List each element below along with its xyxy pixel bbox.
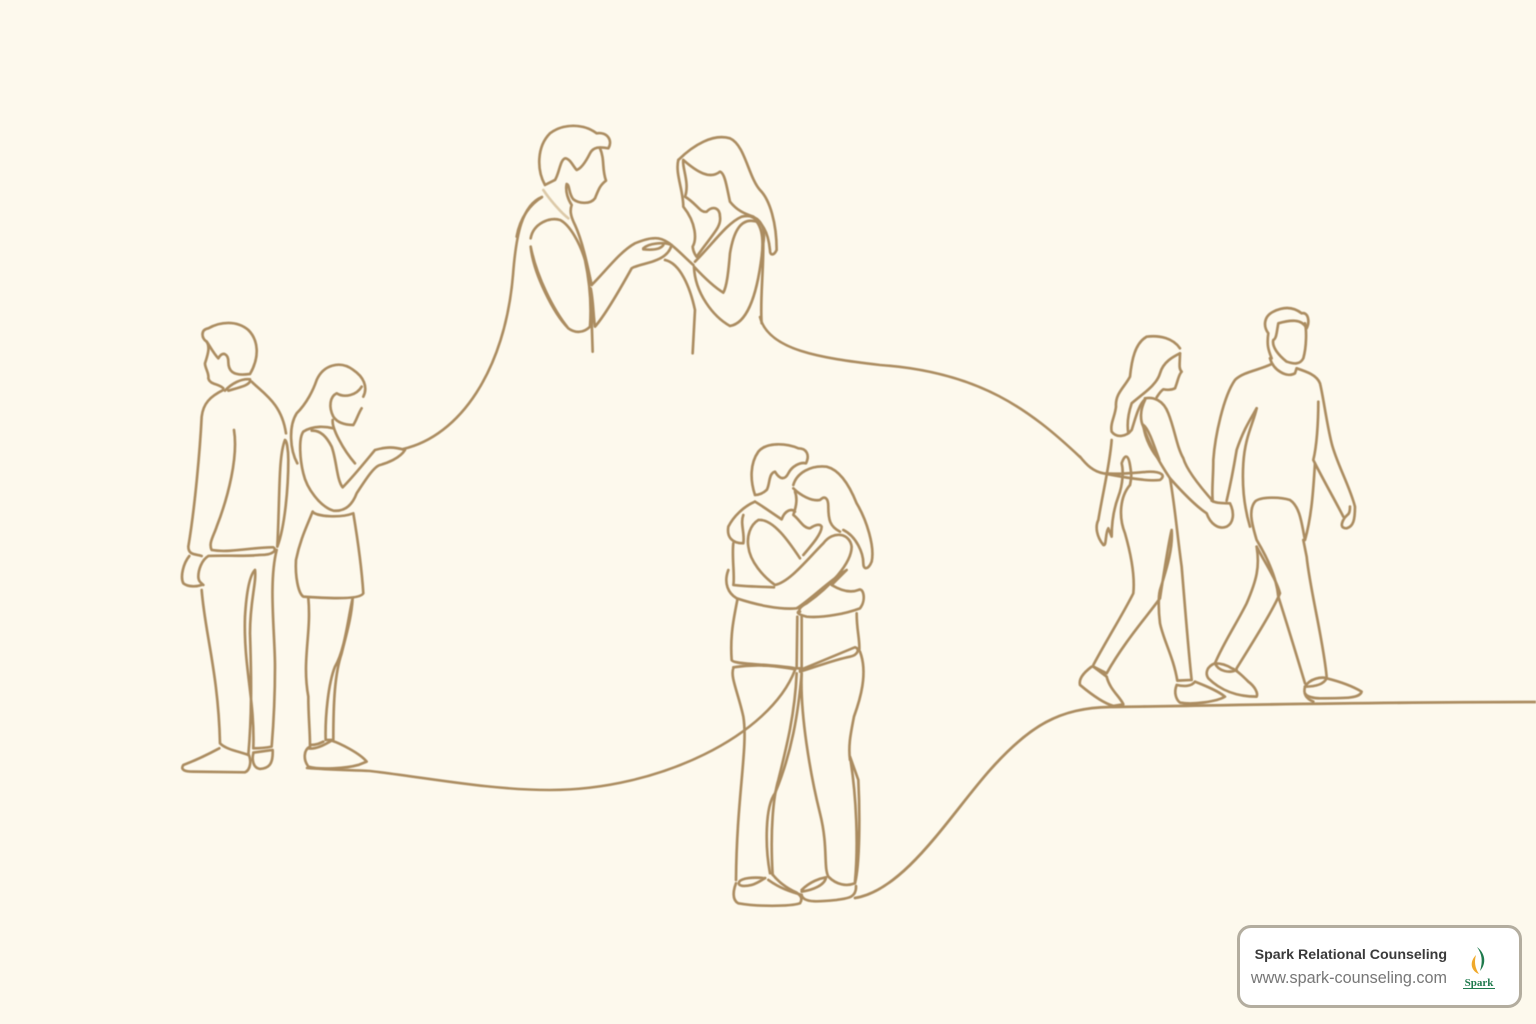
connecting thread: embrace to ground line [855, 702, 1536, 898]
connecting thread: holding hands to walking couple [760, 317, 1080, 457]
icon: Spark logo: Spark [1465, 977, 1494, 989]
figure: couple walking hand in hand [1080, 308, 1362, 706]
company name: Spark Relational Counseling [1255, 947, 1447, 963]
icon: Spark logo [1463, 947, 1495, 989]
connecting thread: standing couple to embrace [307, 670, 795, 790]
connecting thread: phone to first couple [403, 197, 542, 449]
man looking away [182, 323, 288, 772]
brand card [1237, 925, 1522, 1008]
figure: couple back to back [182, 323, 405, 772]
walking man [1207, 308, 1362, 702]
walking woman [1080, 336, 1233, 706]
woman taking hand [653, 137, 777, 353]
woman looking at phone [291, 365, 405, 768]
figure: couple holding hands [517, 126, 777, 353]
figure: embracing couple [726, 444, 872, 906]
man offering hand [517, 126, 672, 352]
website: www.spark-counseling.com [1251, 969, 1447, 987]
